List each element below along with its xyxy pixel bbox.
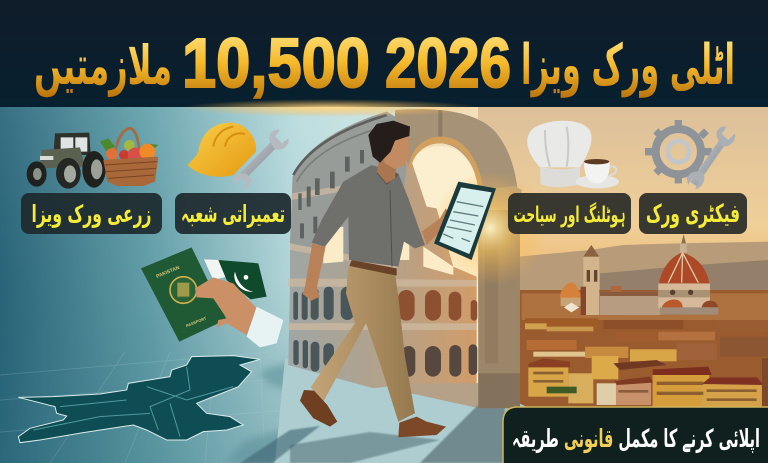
upper slots <box>298 150 364 238</box>
middle tier arches <box>293 287 354 372</box>
small dome <box>560 283 581 298</box>
label: hotel and tourism: ہوٹلنگ اور سیاحت <box>514 201 626 228</box>
glowing opening <box>408 146 478 383</box>
sub: trousers <box>311 267 415 422</box>
sub: back shoe <box>300 390 337 427</box>
icon: wrench <box>233 130 289 189</box>
icon: hard hat <box>188 123 256 177</box>
sub: passport: PASSPORT <box>185 315 208 328</box>
city blocks <box>525 318 598 328</box>
sub: face <box>380 135 409 169</box>
sub: hair <box>368 121 410 163</box>
title: jobs: ملازمتیں <box>34 34 172 97</box>
illustration: floor <box>240 358 527 463</box>
effect: sun flare behind arch <box>432 170 548 286</box>
sub: flag <box>204 259 267 299</box>
icon: tractor <box>27 133 106 189</box>
cathedral dome <box>658 283 710 308</box>
callout: complete legal method to apply <box>503 407 768 463</box>
panel: left teal background <box>0 107 420 463</box>
sub: raised arm <box>422 208 448 245</box>
icon: gear and wrench <box>645 120 735 189</box>
campanile <box>583 257 599 315</box>
sub: passport <box>141 247 227 342</box>
label: construction sector <box>175 193 291 234</box>
panel: right sunset sky <box>420 107 768 463</box>
illustration: Florence skyline <box>518 234 768 407</box>
sub: passport: PAKISTAN <box>155 265 181 280</box>
icon: coffee cup <box>576 159 619 188</box>
sub: forearm and hand <box>303 243 326 301</box>
illustration: Colosseum <box>288 112 478 388</box>
sub: neck <box>377 157 397 183</box>
label: construction sector: تعمیراتی شعبہ <box>181 200 285 228</box>
sub: hand <box>195 277 257 335</box>
sub: shirt <box>312 165 425 267</box>
icon: chef hat <box>527 121 591 187</box>
illustration: stone arch <box>395 109 522 408</box>
title: job count: 10,500 <box>182 24 370 102</box>
sub: cuff <box>247 307 283 347</box>
sub: tablet <box>434 182 496 260</box>
label: agriculture work visa: زرعی ورک ویزا <box>32 200 152 228</box>
title: year: 2026 <box>385 24 511 102</box>
illustration: Pakistan map <box>18 356 260 443</box>
panel: header band <box>0 0 768 117</box>
sub: front shoe <box>398 417 446 437</box>
sub: belt <box>349 260 397 276</box>
label: agriculture work visa <box>21 193 162 234</box>
label: factory work <box>639 193 747 234</box>
illustration: passport, hand and flag <box>141 247 283 347</box>
illustration: walking man <box>300 121 496 437</box>
icon: fruit basket <box>100 128 158 186</box>
label: hotel and tourism <box>508 193 631 234</box>
title <box>34 24 735 102</box>
